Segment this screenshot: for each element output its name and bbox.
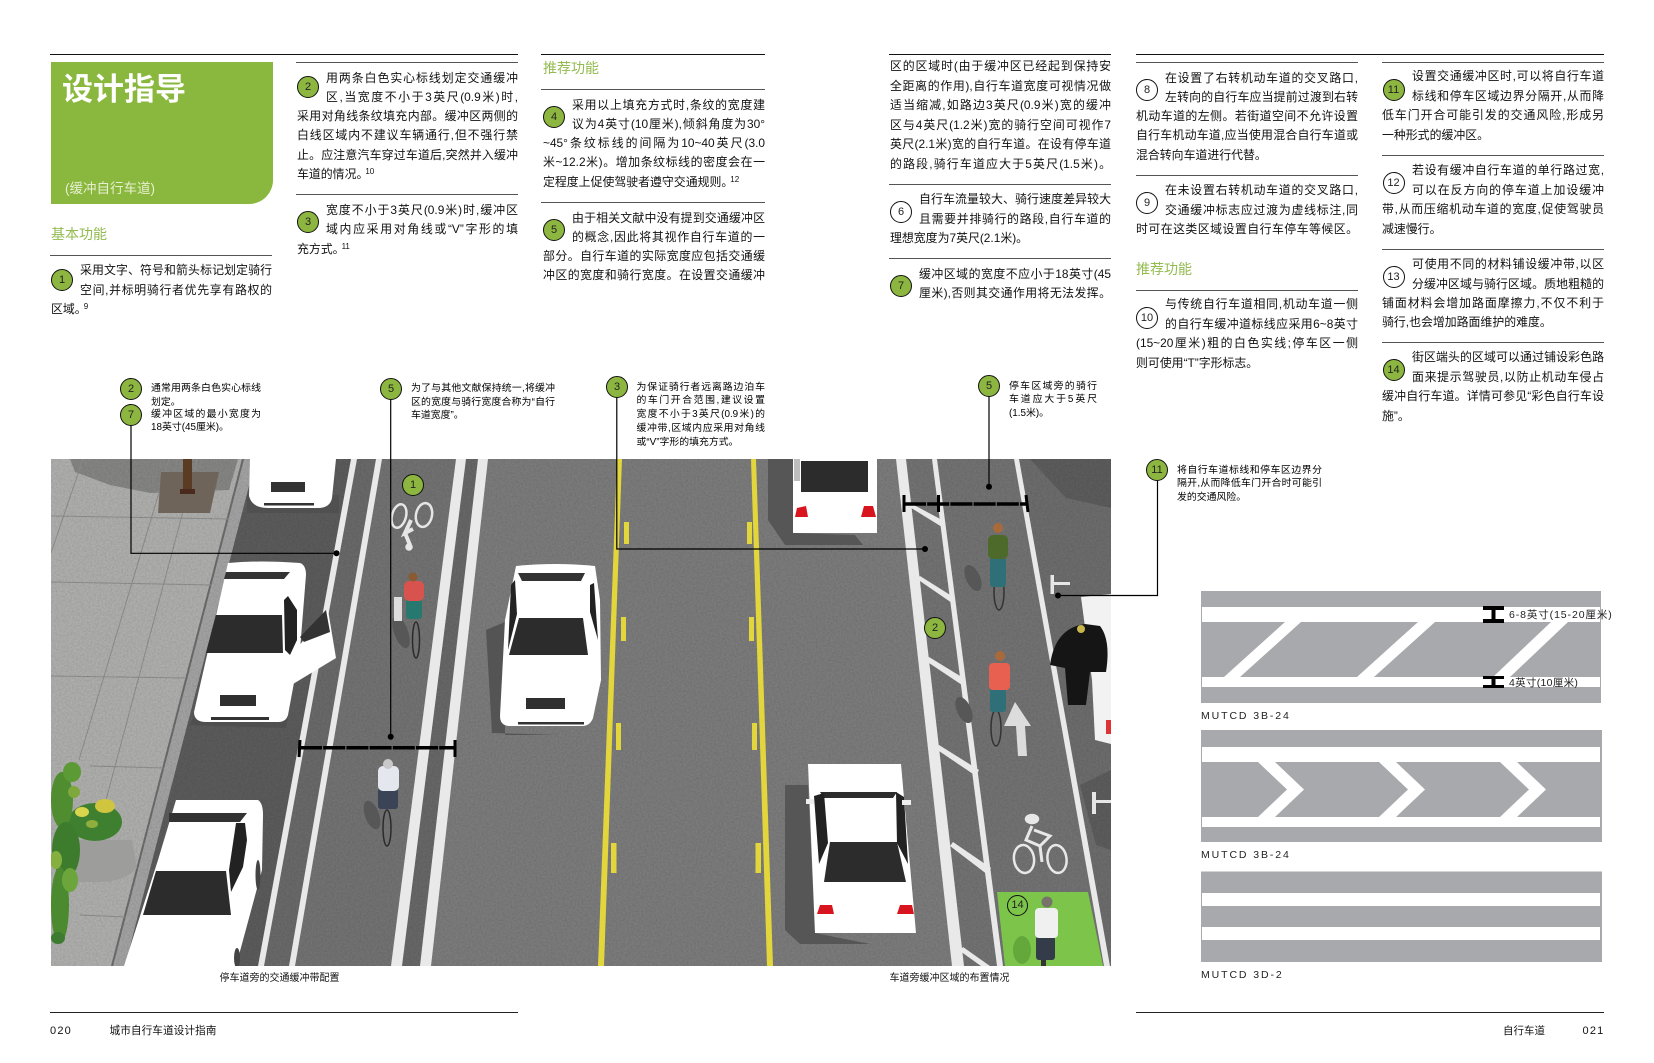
car 5 (768, 459, 877, 545)
item 9 (1136, 183, 1358, 236)
title: 设计指导 (62, 72, 186, 107)
badge 13: 13 (1387, 271, 1400, 283)
callout 5 left (380, 378, 555, 421)
rule (1136, 62, 1358, 63)
badge 9: 9 (1144, 197, 1150, 209)
badge 7: 7 (898, 280, 904, 292)
running footer right: 自行车道 (1503, 1025, 1545, 1037)
item 5 continued: 全距离的作用),自行车道宽度可视情况做 (890, 79, 1111, 93)
item 12 (1382, 163, 1604, 236)
callout text (151, 382, 261, 408)
item 11: 低车门开合可能引发的交通风险,形成另 (1382, 108, 1604, 122)
arrow mark (1004, 702, 1031, 756)
callout text: 缓冲带,区域内应采用对角线 (636, 423, 765, 434)
subtitle: (缓冲自行车道) (65, 181, 155, 196)
badge (1146, 459, 1168, 481)
badge 12 (1382, 172, 1404, 194)
marking caption 1: MUTCD 3B-24 (1201, 710, 1291, 722)
item 9: 在未设置右转机动车道的交叉路口, (1165, 183, 1358, 197)
item 3: 域内应采用对角线或“V”字形的填 (326, 222, 518, 236)
item 6: 理想宽度为7英尺(2.1米)。 (890, 231, 1028, 245)
item 7 (890, 266, 1111, 300)
item 4: 议为4英寸(10厘米),倾斜角度为30° (572, 117, 765, 131)
green conflict pavement (997, 892, 1103, 966)
badge (606, 376, 628, 398)
sidewalk (51, 459, 256, 966)
T mark (1050, 575, 1111, 814)
item 6: 自行车流量较大、骑行速度差异较大 (919, 192, 1111, 206)
item 2 (297, 71, 518, 181)
badge 7 (890, 274, 912, 296)
callout text: 划定。 (151, 397, 181, 408)
item 14 (1382, 350, 1604, 423)
badge 14: 14 (1387, 364, 1400, 376)
item 2: 用两条白色实心标线划定交通缓冲 (326, 71, 518, 85)
item 8: 机动车道的左侧。若街道空间不允许设置 (1136, 109, 1358, 123)
badge 1 (51, 269, 73, 291)
photo caption left: 停车道旁的交通缓冲带配置 (220, 972, 340, 984)
callout 5 right (978, 375, 1097, 419)
car 6 (785, 764, 916, 944)
photo badge 1: 1 (410, 479, 416, 491)
item 3: 宽度不小于3英尺(0.9米)时,缓冲区 (326, 202, 518, 216)
badge 5: 5 (551, 224, 557, 236)
badge 4 (543, 106, 565, 128)
item 12: 减速慢行。 (1382, 222, 1441, 236)
top rule column 3 (541, 54, 765, 55)
heading: recommended features: 推荐功能 (543, 60, 599, 76)
item 9: 交通缓冲标志应过渡为虚线标注,同 (1165, 203, 1358, 217)
marking diagram: solid parallel lines (1201, 872, 1602, 962)
item 8: 左转向的自行车应当提前过渡到右转 (1165, 90, 1358, 104)
item 5 continued: 区的区域时(由于缓冲区已经起到保持安 (890, 59, 1111, 73)
item 7: 缓冲区域的宽度不应小于18英寸(45 (919, 266, 1111, 280)
rule (1382, 342, 1604, 343)
item 14: 缓冲自行车道。详情可参见“彩色自行车设 (1382, 389, 1604, 403)
callout text: 车道应大于5英尺 (1009, 394, 1097, 405)
badge: 2 (128, 383, 134, 395)
item 13: 可使用不同的材料铺设缓冲带,以区 (1412, 257, 1604, 271)
badge 6: 6 (898, 206, 904, 218)
callout text: 为了与其他文献保持统一,将缓冲 (411, 383, 555, 394)
footer rule right (1136, 1012, 1604, 1013)
badge 5 (543, 219, 565, 241)
callout text: 隔开,从而降低车门开合时可能引 (1177, 478, 1322, 489)
item 2: 区,当宽度不小于3英尺(0.9米)时, (326, 90, 518, 104)
item 1: 采用文字、符号和箭头标记划定骑行 (80, 263, 272, 277)
top rule right page (1136, 54, 1604, 55)
item 10: 与传统自行车道相同,机动车道一侧 (1165, 297, 1358, 311)
item 14: 施”。 (1382, 409, 1410, 423)
texture (51, 459, 1111, 966)
item 10: (15~20厘米)粗的白色实线;停车区一侧 (1136, 336, 1358, 350)
item 5 continued: 的路段,骑行车道应大于5英尺(1.5米)。 (890, 157, 1111, 171)
cyclist red right (952, 651, 1010, 746)
item 2: 采用对角线条纹填充内部。缓冲区两侧的 (297, 109, 518, 123)
callout text: 缓冲区域的最小宽度为 (151, 409, 261, 420)
item 5: 的概念,因此将其视作自行车道的一 (572, 230, 765, 244)
cyclist red left (389, 572, 424, 658)
marking diagram: diagonal crosshatch (1201, 591, 1613, 703)
badge: 5 (388, 383, 394, 395)
badge 2: 2 (305, 81, 311, 93)
badge 2 (297, 76, 319, 98)
right buffer lane lines (896, 459, 1110, 966)
item 2: 车道的情况。10 (297, 167, 374, 181)
badge: 7 (128, 409, 134, 421)
title panel (51, 62, 273, 204)
rule (889, 258, 1111, 259)
badge 3 (297, 210, 319, 232)
item 14: 面来提示驾驶员,以防止机动车侵占 (1412, 370, 1604, 384)
item 8: 在设置了右转机动车道的交叉路口, (1165, 71, 1358, 85)
item 4: 米~12.2米)。增加条纹标线的密度会在一 (543, 155, 765, 169)
car 7 and opened door figure (1050, 594, 1111, 744)
badge 12: 12 (1387, 177, 1400, 189)
illustration layer: street photo, leaders and pavement marking diagrams (51, 396, 1612, 978)
badge 11: 11 (1388, 84, 1399, 96)
callout text: 的车门开合范围,建议设置 (636, 395, 765, 406)
badge 11 (1382, 79, 1404, 101)
item 4: ~45°条纹标线的间隔为10~40英尺(3.0 (543, 136, 765, 150)
callout text (1177, 464, 1322, 503)
callout text: 停车区域旁的骑行 (1009, 381, 1097, 392)
marking caption 2: MUTCD 3B-24 (1201, 849, 1291, 861)
badge (380, 378, 402, 400)
callout text: 宽度不小于3英尺(0.9米)的 (636, 409, 765, 420)
rule (1382, 155, 1604, 156)
badge (120, 404, 142, 426)
item 11: 设置交通缓冲区时,可以将自行车道 (1412, 69, 1604, 83)
rule (1136, 290, 1358, 291)
item 8 (1136, 71, 1358, 162)
callout 11 (1146, 459, 1322, 503)
rule (1382, 249, 1604, 250)
callout 2 (120, 378, 261, 408)
rule (889, 184, 1111, 185)
badge (120, 378, 142, 400)
callout text: (1.5米)。 (1009, 408, 1049, 419)
badge 3: 3 (305, 216, 311, 228)
item 12: 可以在反方向的停车道上加设缓冲 (1412, 183, 1604, 197)
callout text: 为保证骑行者远离路边泊车 (636, 382, 765, 393)
item 5: 部分。自行车道的实际宽度应包括交通缓 (543, 249, 765, 263)
rule (296, 62, 518, 63)
item 5 continued: 英尺(2.1米)宽的自行车道。在设有停车道 (890, 137, 1111, 151)
callout text (1009, 380, 1097, 419)
item 13: 骑行,也会增加路面维护的难度。 (1382, 315, 1552, 329)
dimension bar: bike lane width (904, 495, 1028, 512)
photo badge 2 (924, 617, 946, 639)
car 2 with open door (190, 562, 336, 728)
badge: 3 (614, 381, 620, 393)
callout text (411, 382, 555, 421)
rule (1382, 62, 1604, 63)
rule (541, 202, 765, 203)
leader lines (131, 386, 1158, 740)
callout text: 区的宽度与骑行宽度合称为“自行 (411, 397, 555, 408)
photo badge 2: 2 (932, 622, 938, 634)
photo badge 14: 14 (1011, 898, 1024, 910)
street scene photo (50, 459, 1111, 968)
badge 8: 8 (1144, 84, 1150, 96)
item 8: 混合转向车道进行代替。 (1136, 148, 1267, 162)
callout text (151, 408, 261, 433)
badge: 5 (986, 380, 992, 392)
tree pit and trunk (158, 459, 219, 513)
badge 10 (1136, 307, 1158, 329)
photo badge 1 (402, 474, 424, 496)
item 11 (1382, 69, 1604, 142)
callout text: 将自行车道标线和停车区边界分 (1177, 465, 1322, 476)
badge 14 (1382, 359, 1404, 381)
badge 9 (1136, 192, 1158, 214)
item 7: 厘米),否则其交通作用将无法发挥。 (919, 286, 1111, 300)
running footer left: 城市自行车道设计指南 (110, 1025, 216, 1037)
item 8: 自行车机动车道,应当使用混合自行车道或 (1136, 128, 1358, 142)
photo badge 14 (1007, 894, 1028, 916)
top rule left page (50, 54, 518, 55)
item 1: 空间,并标明骑行者优先享有路权的 (80, 283, 272, 297)
heading: recommended features right: 推荐功能 (1136, 261, 1192, 277)
badge 8 (1136, 79, 1158, 101)
item 5: 冲区的宽度和骑行宽度。在设置交通缓冲 (543, 268, 765, 282)
page number right: 021 (1582, 1025, 1604, 1037)
item 13: 分缓冲区域与骑行区域。质地粗糙的 (1412, 277, 1604, 291)
callout 7 (120, 404, 261, 433)
cyclist green right (961, 523, 1008, 610)
item 13 (1382, 257, 1604, 329)
item 10 (1136, 297, 1358, 370)
page number left: 020 (50, 1025, 72, 1037)
car 1 (247, 459, 339, 513)
item 14: 街区端头的区域可以通过铺设彩色路 (1412, 350, 1604, 364)
badge: 11 (1151, 464, 1163, 476)
callout text: 或“V”字形的填充方式。 (636, 436, 739, 448)
item 1: 区域。9 (51, 302, 88, 316)
item 6: 且需要并排骑行的路段,自行车道的 (919, 212, 1111, 226)
badge (978, 375, 1000, 397)
badge 13 (1382, 266, 1404, 288)
item 2: 白线区域内不建议车辆通行,但不强行禁 (297, 128, 518, 142)
item 5: 由于相关文献中没有提到交通缓冲区 (572, 211, 765, 225)
item 11: 一种形式的缓冲区。 (1382, 128, 1489, 142)
footer rule left (50, 1012, 518, 1013)
item 4 (543, 98, 765, 188)
yellow centre lines (598, 459, 773, 966)
item 11: 标线和停车区域边界分隔开,从而降 (1412, 88, 1604, 102)
rule (1136, 175, 1358, 176)
cyclist white right (1013, 896, 1058, 966)
photo caption right: 车道旁缓冲区域的布置情况 (890, 972, 1010, 984)
rule (296, 194, 518, 195)
callout text: 车道宽度”。 (411, 410, 464, 421)
callout text: 18英寸(45厘米)。 (151, 422, 229, 433)
rule (50, 255, 272, 256)
callout 3 (606, 376, 765, 448)
badge 6 (890, 201, 912, 223)
item 3: 充方式。11 (297, 242, 350, 256)
item 5 continued: 区与4英尺(1.2米)宽的骑行空间可视作7 (890, 118, 1111, 132)
item 10: 则可使用“T”字形标志。 (1136, 356, 1258, 370)
item 3 (297, 202, 518, 256)
left lane lines (258, 459, 488, 966)
callout text (636, 382, 765, 448)
item 5 (543, 211, 765, 282)
item 4: 采用以上填充方式时,条纹的宽度建 (572, 98, 765, 112)
parking bay and lane surfaces (125, 459, 1111, 966)
badge 10: 10 (1141, 312, 1153, 324)
planter and foliage (50, 762, 137, 944)
car 4 (124, 800, 263, 968)
dimension bar: parking buffer width (299, 740, 455, 757)
marking diagram: diagonal crosshatch: 4英寸(10厘米) (1509, 676, 1578, 689)
cyclist white left (360, 759, 399, 846)
item 12: 若设有缓冲自行车道的单行路过宽, (1412, 163, 1604, 177)
item 9: 时可在这类区域设置自行车停车等候区。 (1136, 222, 1358, 236)
item 5 continued: 适当缩减,如路边3英尺(0.9米)宽的缓冲 (890, 98, 1111, 112)
item 2: 止。应注意汽车穿过车道后,突然并入缓冲 (297, 148, 518, 162)
item 5 continued (890, 59, 1111, 171)
item 4: 定程度上促使驾驶者遵守交通规则。12 (543, 174, 739, 188)
callout text: 通常用两条白色实心标线 (151, 383, 261, 394)
badge 1: 1 (59, 274, 65, 286)
marking caption 3: MUTCD 3D-2 (1201, 969, 1284, 981)
rule (541, 89, 765, 90)
badge 4: 4 (551, 111, 557, 123)
marking diagram: diagonal crosshatch: 6-8英寸(15-20厘米) (1509, 608, 1613, 621)
top rule column 4 (889, 54, 1111, 55)
item 12: 带,从而压缩机动车道的宽度,促使驾驶员 (1382, 202, 1604, 216)
item 10: 的自行车缓冲道标线应采用6~8英寸 (1165, 317, 1358, 331)
car 3 (486, 564, 601, 735)
heading: basic features: 基本功能 (51, 226, 107, 242)
item 1 (51, 263, 272, 316)
marking diagram: chevron (1201, 730, 1602, 842)
bike symbol left (389, 502, 434, 550)
bike symbol right (1012, 815, 1068, 874)
item 6 (890, 192, 1111, 245)
item 13: 铺面材料会增加路面摩擦力,不仅不利于 (1382, 296, 1604, 310)
callout text: 发的交通风险。 (1177, 492, 1246, 503)
